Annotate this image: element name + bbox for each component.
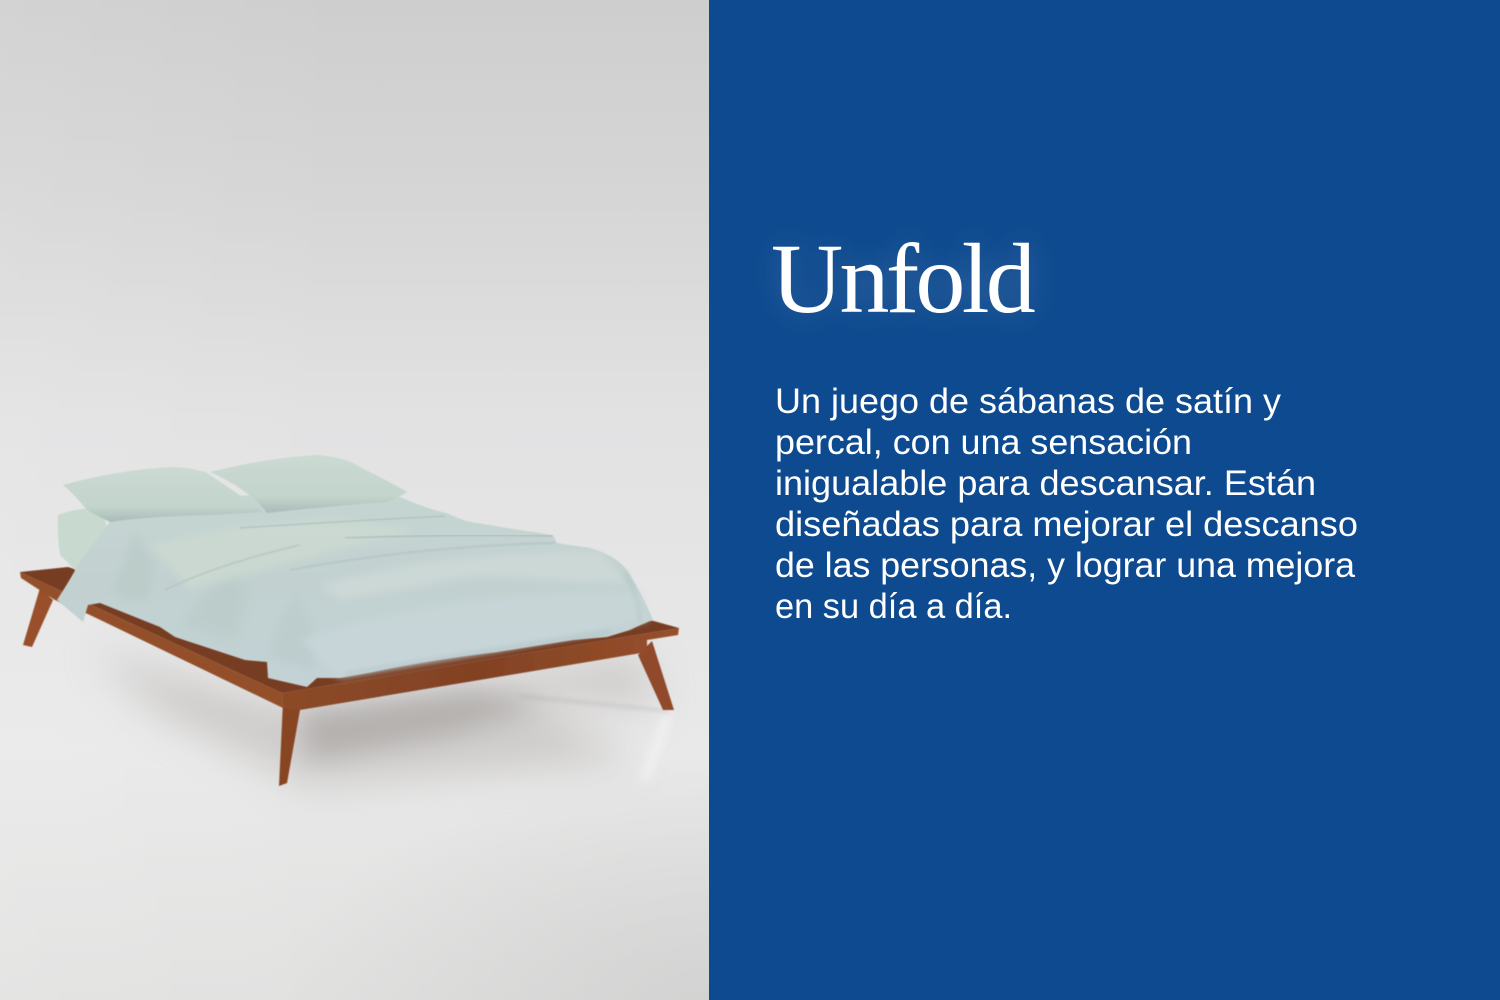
bed frame xyxy=(20,567,679,786)
right pillow xyxy=(210,455,407,513)
frame front rail xyxy=(282,628,679,710)
description text block: percal, con una sensación xyxy=(775,423,1192,462)
floor shadow under bed xyxy=(90,650,668,785)
top sheet xyxy=(57,495,653,687)
description text block: Un juego de sábanas de satín y xyxy=(775,382,1282,421)
sheet shading and folds xyxy=(112,516,648,678)
photo: bed on grey studio background xyxy=(0,0,709,1000)
description text block xyxy=(775,382,1358,626)
description text block: de las personas, y lograr una mejora xyxy=(775,546,1356,585)
description text block: inigualable para descansar. Están xyxy=(775,464,1316,503)
frame left rail xyxy=(20,572,283,708)
left leg xyxy=(23,588,53,647)
title: Unfold xyxy=(771,223,1032,334)
panel: blue text panel xyxy=(709,0,1500,1000)
description text block: diseñadas para mejorar el descanso xyxy=(775,505,1358,544)
frame top surface xyxy=(20,567,679,693)
left pillow xyxy=(63,467,263,522)
front leg xyxy=(279,702,300,786)
description text block: en su día a día. xyxy=(775,587,1012,626)
right leg xyxy=(638,641,674,710)
fitted sheet on mattress xyxy=(58,508,120,575)
background wall and floor xyxy=(0,0,709,1000)
